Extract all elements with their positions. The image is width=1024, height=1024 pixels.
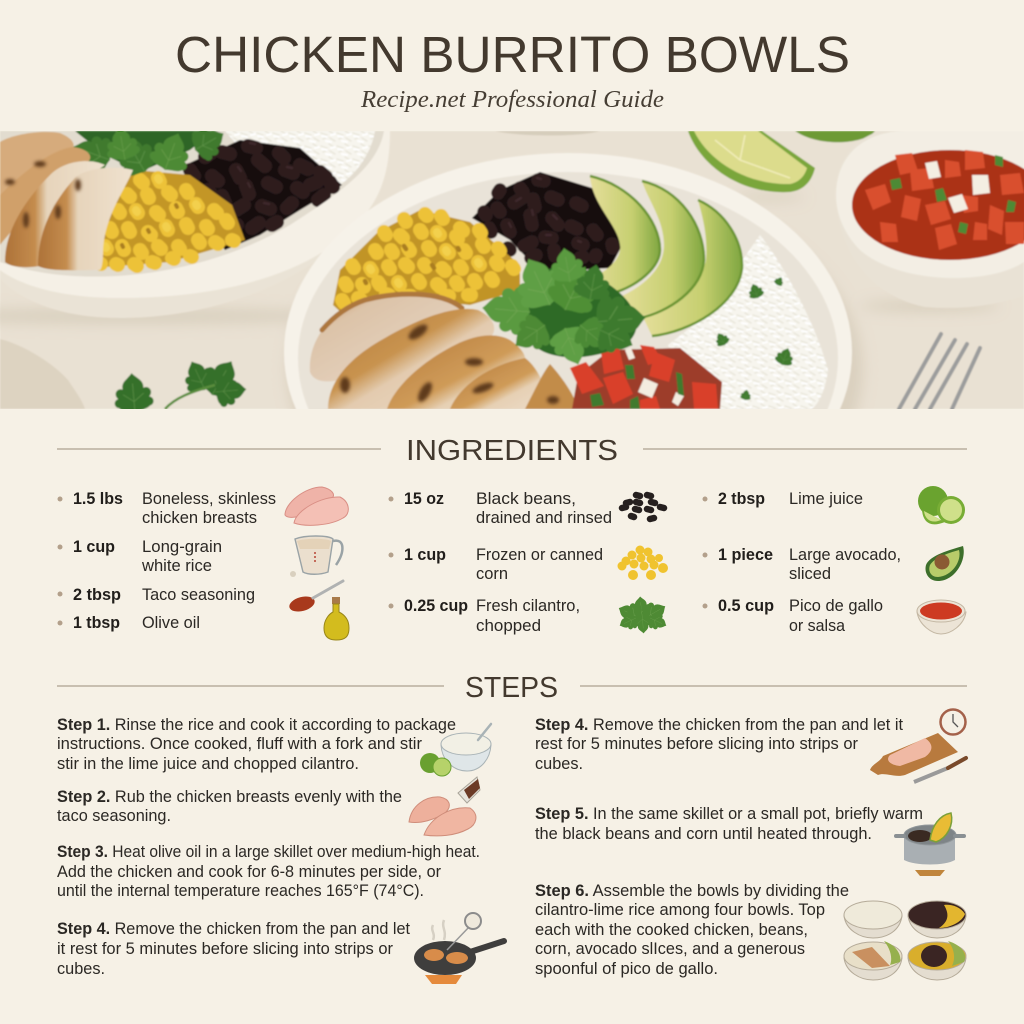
whole lime at top [795,131,875,142]
pico de gallo [570,343,722,409]
bullets [58,496,62,626]
item: seasoning: 2 tbsp [73,586,121,604]
icon: four assembled bowls [844,901,966,980]
item: oil [73,614,200,632]
item: chicken: Boneless, skinless [142,490,276,508]
item: lime juice: 2 tbsp [718,490,765,508]
step 3 text [57,843,480,900]
bullets [702,496,708,608]
icon: cilantro [614,596,671,634]
step 4 text: Step 4. Remove the chicken from the pan and let it [535,716,903,734]
item: corn: Frozen or canned [476,546,603,564]
item: oil: Olive oil [142,614,200,632]
step 4 text: Step 4. Remove the chicken from the pan and let [57,920,410,938]
item: corn: corn [476,565,508,583]
rice cilantro flecks [712,275,797,401]
left bowl corn [92,170,245,268]
title block [175,26,850,113]
item: chicken [73,490,276,527]
step 4 text: cubes. [57,960,105,978]
item: corn [404,546,603,583]
icon: clock, cutting board and knife [870,710,966,782]
item: avocado [718,546,901,583]
panel: steps right column [535,710,966,980]
step 6 text: cilantro-lime rice among four bowls. Top [535,901,825,919]
step 4 text [535,716,903,773]
item: rice [73,538,222,575]
section heading: steps: STEPS [465,672,558,704]
step 6 text: corn, avocado slIces, and a generous [535,940,805,958]
item: rice: white rice [141,557,212,575]
item: rice: 1 cup [73,538,115,556]
cilantro [480,245,648,371]
icon: olive oil bottle [324,597,349,640]
step 5 text: the black beans and corn until heated through. [535,825,872,843]
step 4 text: cubes. [535,755,583,773]
bowl: rice [844,901,902,938]
corn [333,210,520,316]
bullets [388,496,394,608]
item: seasoning [73,586,255,604]
fork [899,334,980,409]
step 1 text [57,716,456,773]
rice [668,235,828,409]
item: lime juice: Lime juice [789,490,863,508]
item: avocado: Large avocado, [789,546,901,564]
step 1 text: instructions. Once cooked, fluff with a fork and stir [57,735,423,753]
icon: corn kernels [618,546,668,580]
avocado slices [590,176,742,336]
item: avocado: sliced [789,565,831,583]
icon: measuring cup [290,536,342,577]
table surface [0,131,1024,409]
icon: skillet with thermometer [414,913,504,984]
item: lime juice [718,490,863,508]
panel: ingredients column 2 [388,490,671,635]
item: cilantro [404,597,580,635]
icon: black beans [622,495,664,519]
item: black beans: Black beans, [476,490,576,508]
item: corn: 1 cup [404,546,446,564]
left bowl rice [225,131,375,188]
item: avocado: 1 piece [718,546,773,564]
black beans [472,172,625,272]
cilantro sprig on table [114,360,247,409]
top plate edge [495,131,600,136]
item: black beans: drained and rinsed [476,509,612,527]
step 6 text: each with the cooked chicken, beans, [535,921,808,939]
bowl: beans and corn [908,901,966,938]
salsa bowl [836,131,1024,311]
bowl: corn, beans, avocado [908,941,966,980]
step 1 text: stir in the lime juice and chopped cilantro. [57,755,359,773]
item: black beans [404,490,612,527]
icon: pot with corn [896,813,964,876]
napkin [0,339,85,409]
item: rice: Long-grain [142,538,222,556]
icon: avocado [926,546,964,581]
icon: chicken breasts [285,487,348,525]
step 5 text: Step 5. In the same skillet or a small pot, briefly warm [535,805,923,823]
salsa pieces [865,150,1024,250]
bowl: chicken and avocado [844,941,902,980]
step 4 text: rest for 5 minutes before slicing into strips or [535,735,859,753]
step 2 text [57,788,402,825]
item: pico: Pico de gallo [789,597,883,615]
left bowl chicken slices [0,132,133,270]
main bowl [284,152,864,409]
title: CHICKEN BURRITO BOWLS [175,26,850,83]
step 6 text [535,882,849,978]
item: pico [718,597,883,635]
item: chicken: chicken breasts [142,509,257,527]
left bowl cilantro [73,131,224,176]
step 2 text: taco seasoning. [57,807,171,825]
step 6 text: Step 6. Assemble the bowls by dividing the [535,882,849,900]
step 2 text: Step 2. Rub the chicken breasts evenly with the [57,788,402,806]
step 5 text [535,805,923,843]
item: seasoning: Taco seasoning [142,586,255,604]
item: cilantro: 0.25 cup [404,597,468,615]
item: cilantro: Fresh cilantro, [476,597,580,615]
item: oil: 1 tbsp [73,614,120,632]
item: pico: 0.5 cup [718,597,774,615]
item: black beans: 15 oz [404,490,444,508]
step 3 text: Add the chicken and cook for 6-8 minutes per side, or [57,863,442,881]
left bowl rim highlight [0,131,390,298]
left bowl beans [185,140,342,250]
section heading: ingredients: INGREDIENTS [406,435,618,467]
lime wedge [688,131,815,201]
item: cilantro: chopped [476,617,541,635]
step 3 text: Step 3. Heat olive oil in a large skillet over medium-high heat. [57,843,480,861]
icon: salsa bowl [917,600,966,634]
item: chicken: 1.5 lbs [73,490,123,508]
step 1 text: Step 1. Rinse the rice and cook it according to package [57,716,456,734]
subtitle: Recipe.net Professional Guide [360,87,664,113]
panel: ingredients column 3 [702,486,966,635]
left bowl [0,119,390,324]
chicken slices [310,294,578,409]
icon: limes [918,486,965,524]
item: pico: or salsa [789,617,846,635]
step 4 text [57,920,410,978]
step 3 text: until the internal temperature reaches 165°F (74°C). [57,882,424,900]
icon: spoon of spice [288,581,343,614]
step 6 text: spoonful of pico de gallo. [535,960,718,978]
panel: ingredients column 1 [58,487,349,640]
icon: rice bowl with lime [420,724,491,776]
hero photo: burrito bowls on a table [0,131,1024,409]
icon: chicken and shaker [409,777,480,836]
step 4 text: it rest for 5 minutes before slicing into strips or [57,940,394,958]
panel: steps left column [57,716,504,984]
